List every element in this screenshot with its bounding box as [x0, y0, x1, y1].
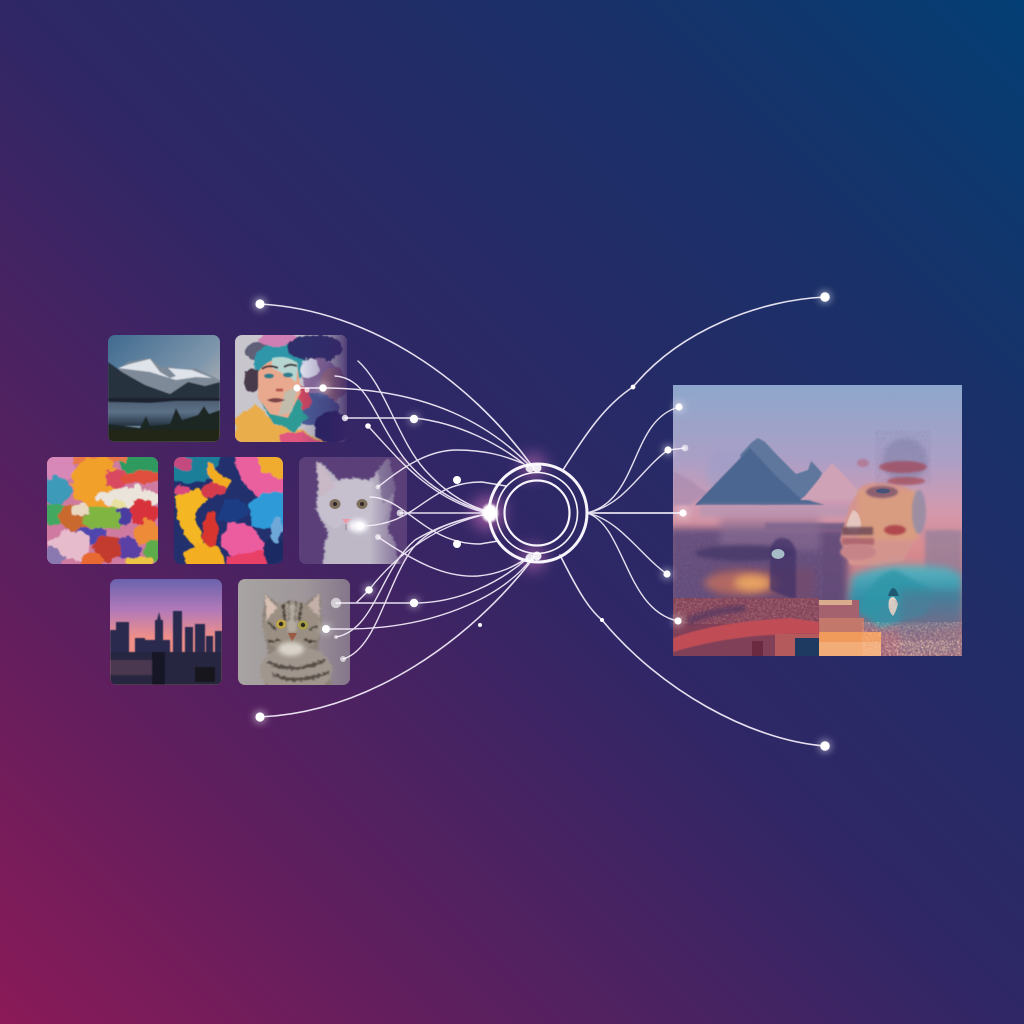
thumbnail: grey cat [299, 457, 407, 574]
thumbnail: mountain lake [108, 335, 220, 442]
dispersing hair particles [883, 438, 927, 482]
lines from top row thumbnails [297, 361, 530, 513]
face [838, 482, 914, 566]
thumbnail: tabby cat [238, 579, 350, 694]
thumbnail: painted portrait [235, 334, 350, 445]
distant mountains [673, 471, 708, 505]
dark city base [673, 522, 854, 600]
horizontal smears [700, 505, 875, 517]
node glows [254, 291, 831, 752]
solid nodes [255, 292, 830, 751]
thumbnail: abstract painting one [47, 457, 158, 564]
connection lines [260, 297, 825, 746]
outer left arcs [260, 304, 532, 717]
thumbnail: city at dusk [110, 579, 222, 685]
end nodes [254, 291, 831, 752]
thumbnail: abstract painting two [174, 457, 283, 564]
lower orange blocks [819, 600, 859, 620]
red bridge [673, 598, 819, 656]
teal swoosh [848, 565, 962, 635]
hub nodes [482, 464, 542, 562]
central ring [489, 464, 587, 562]
lines from bottom row thumbnails [326, 514, 532, 659]
lines from grey cat [360, 482, 527, 576]
output image: blended composite [668, 385, 962, 656]
lines to output image [560, 297, 825, 746]
glow around central ring [472, 454, 545, 570]
